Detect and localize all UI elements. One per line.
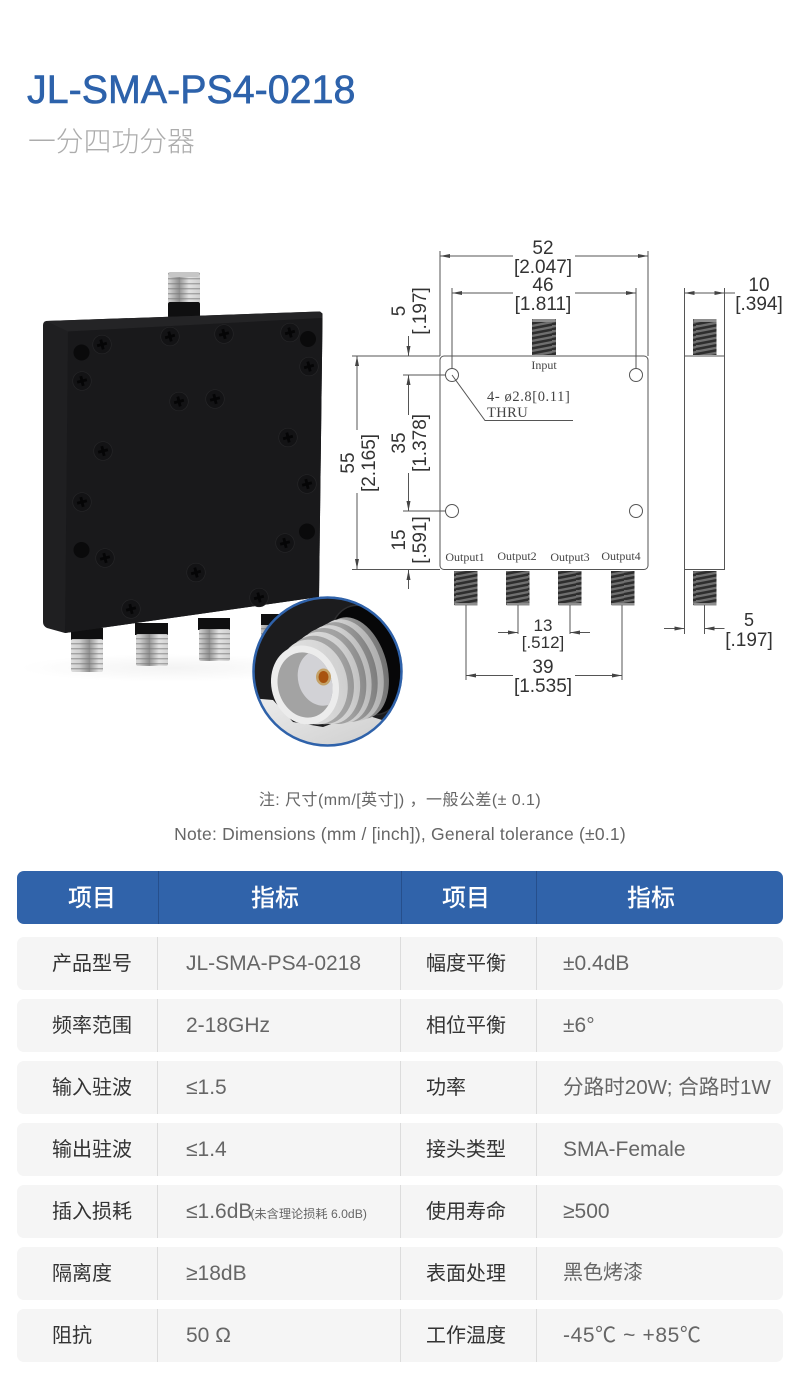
dimension labels: [1.378] bbox=[410, 414, 431, 472]
dimension labels: 13 bbox=[534, 616, 552, 635]
title: JL-SMA-PS4-0218 bbox=[27, 68, 355, 112]
table row: input VSWR / power: 输入驻波 bbox=[52, 1077, 132, 1099]
table row: isolation / finish: 黑色烤漆 bbox=[563, 1262, 643, 1284]
table row: impedance / temperature: 50 Ω bbox=[186, 1324, 231, 1347]
table row: model / amplitude balance: 幅度平衡 bbox=[426, 953, 506, 975]
table row: insertion loss / life: ≥500 bbox=[563, 1200, 610, 1223]
table row: input VSWR / power: 分路时20W; 合路时1W bbox=[563, 1076, 771, 1099]
connector end caps bbox=[454, 319, 716, 606]
output connectors bbox=[71, 614, 281, 672]
table row: impedance / temperature: 工作温度 bbox=[426, 1325, 506, 1347]
dimension labels: [1.535] bbox=[514, 676, 572, 697]
dimension labels: 46 bbox=[532, 275, 554, 296]
table row: output VSWR / connector bbox=[17, 1123, 783, 1176]
dimension labels: [.197] bbox=[410, 287, 431, 335]
table row: isolation / finish: 表面处理 bbox=[426, 1263, 506, 1285]
dimension labels: Output2 bbox=[497, 549, 537, 563]
inset: connector close-up bbox=[252, 596, 403, 747]
table row: model / amplitude balance: ±0.4dB bbox=[563, 952, 629, 975]
dimension labels: Output3 bbox=[550, 550, 590, 564]
dimension drawing bbox=[352, 251, 735, 680]
subtitle: 一分四功分器 bbox=[28, 120, 195, 160]
product photo and dimension drawing bbox=[43, 238, 783, 747]
table row: output VSWR / connector: SMA-Female bbox=[563, 1138, 686, 1161]
table row: output VSWR / connector: 接头类型 bbox=[426, 1139, 506, 1161]
table row: frequency / phase balance: 相位平衡 bbox=[426, 1015, 506, 1037]
table row: frequency / phase balance bbox=[17, 999, 783, 1052]
dimension labels: 10 bbox=[748, 275, 770, 296]
dimension lines bbox=[352, 251, 735, 680]
screws bbox=[73, 323, 318, 618]
dimension labels: [.512] bbox=[522, 633, 564, 652]
table header: 项目 bbox=[442, 885, 490, 912]
table row: model / amplitude balance: 产品型号 bbox=[52, 953, 132, 975]
dimension labels: Output4 bbox=[601, 549, 641, 563]
dimension labels: 35 bbox=[389, 432, 410, 454]
table row: insertion loss / life: 插入损耗 bbox=[52, 1201, 132, 1223]
table row: insertion loss / life: ≤1.6dB(未含理论损耗 6.0dB) bbox=[186, 1200, 367, 1223]
table row: impedance / temperature: -45℃ ~ +85℃ bbox=[563, 1324, 702, 1347]
mounting holes bbox=[74, 331, 316, 558]
table row: output VSWR / connector: 输出驻波 bbox=[52, 1139, 132, 1161]
table row: model / amplitude balance bbox=[17, 937, 783, 990]
table row: input VSWR / power bbox=[17, 1061, 783, 1114]
body front face bbox=[65, 318, 322, 633]
dimension labels: Input bbox=[531, 358, 557, 372]
note: English: Note: Dimensions (mm / [inch]), General tolerance (±0.1) bbox=[174, 824, 626, 844]
table row: isolation / finish: ≥18dB bbox=[186, 1262, 247, 1285]
threaded connectors bbox=[454, 319, 716, 605]
mounting hole circles bbox=[446, 368, 642, 518]
table row: impedance / temperature: 阻抗 bbox=[52, 1325, 92, 1347]
table row: impedance / temperature bbox=[17, 1309, 783, 1362]
dimension labels: 5 bbox=[389, 306, 410, 316]
dimension labels: 15 bbox=[389, 529, 410, 551]
dimension labels: [2.165] bbox=[359, 434, 380, 492]
photo: power divider bbox=[20, 272, 322, 682]
table row: output VSWR / connector: ≤1.4 bbox=[186, 1138, 227, 1161]
table header: 项目 bbox=[68, 885, 116, 912]
table row: isolation / finish: 隔离度 bbox=[52, 1263, 112, 1285]
front outline bbox=[440, 356, 648, 570]
dimension labels bbox=[338, 238, 783, 697]
dimension labels: 5 bbox=[744, 610, 754, 630]
table row: frequency / phase balance: 频率范围 bbox=[52, 1015, 132, 1037]
table row: frequency / phase balance: ±6° bbox=[563, 1014, 595, 1037]
table row: isolation / finish bbox=[17, 1247, 783, 1300]
table row: model / amplitude balance: JL-SMA-PS4-0218 bbox=[186, 952, 361, 975]
table header: 指标 bbox=[251, 885, 299, 912]
side outline bbox=[684, 356, 724, 570]
dimension labels: 39 bbox=[532, 657, 554, 678]
table row: insertion loss / life bbox=[17, 1185, 783, 1238]
table row: frequency / phase balance: 2-18GHz bbox=[186, 1014, 270, 1037]
dimension labels: [.394] bbox=[735, 294, 783, 315]
table row: input VSWR / power: 功率 bbox=[426, 1077, 466, 1099]
body side and top faces bbox=[43, 312, 322, 633]
top connector bbox=[168, 272, 200, 318]
dimension labels: [.591] bbox=[410, 516, 431, 564]
dimension labels: Output1 bbox=[445, 550, 485, 564]
table row: insertion loss / life: 使用寿命 bbox=[426, 1201, 506, 1223]
dimension labels: 52 bbox=[532, 238, 554, 259]
dimension labels: [2.047] bbox=[514, 257, 572, 278]
dimension labels: [.197] bbox=[725, 630, 773, 651]
dimension labels: [1.811] bbox=[515, 294, 571, 315]
table row: input VSWR / power: ≤1.5 bbox=[186, 1076, 227, 1099]
table header bbox=[17, 871, 783, 924]
dimension labels: 4- ø2.8[0.11] bbox=[487, 389, 570, 405]
dimension labels: THRU bbox=[487, 405, 528, 421]
note: Chinese: 注: 尺寸(mm/[英寸]) ，一般公差(± 0.1) bbox=[259, 792, 541, 809]
table header: 指标 bbox=[627, 885, 675, 912]
dimension labels: 55 bbox=[338, 452, 359, 474]
